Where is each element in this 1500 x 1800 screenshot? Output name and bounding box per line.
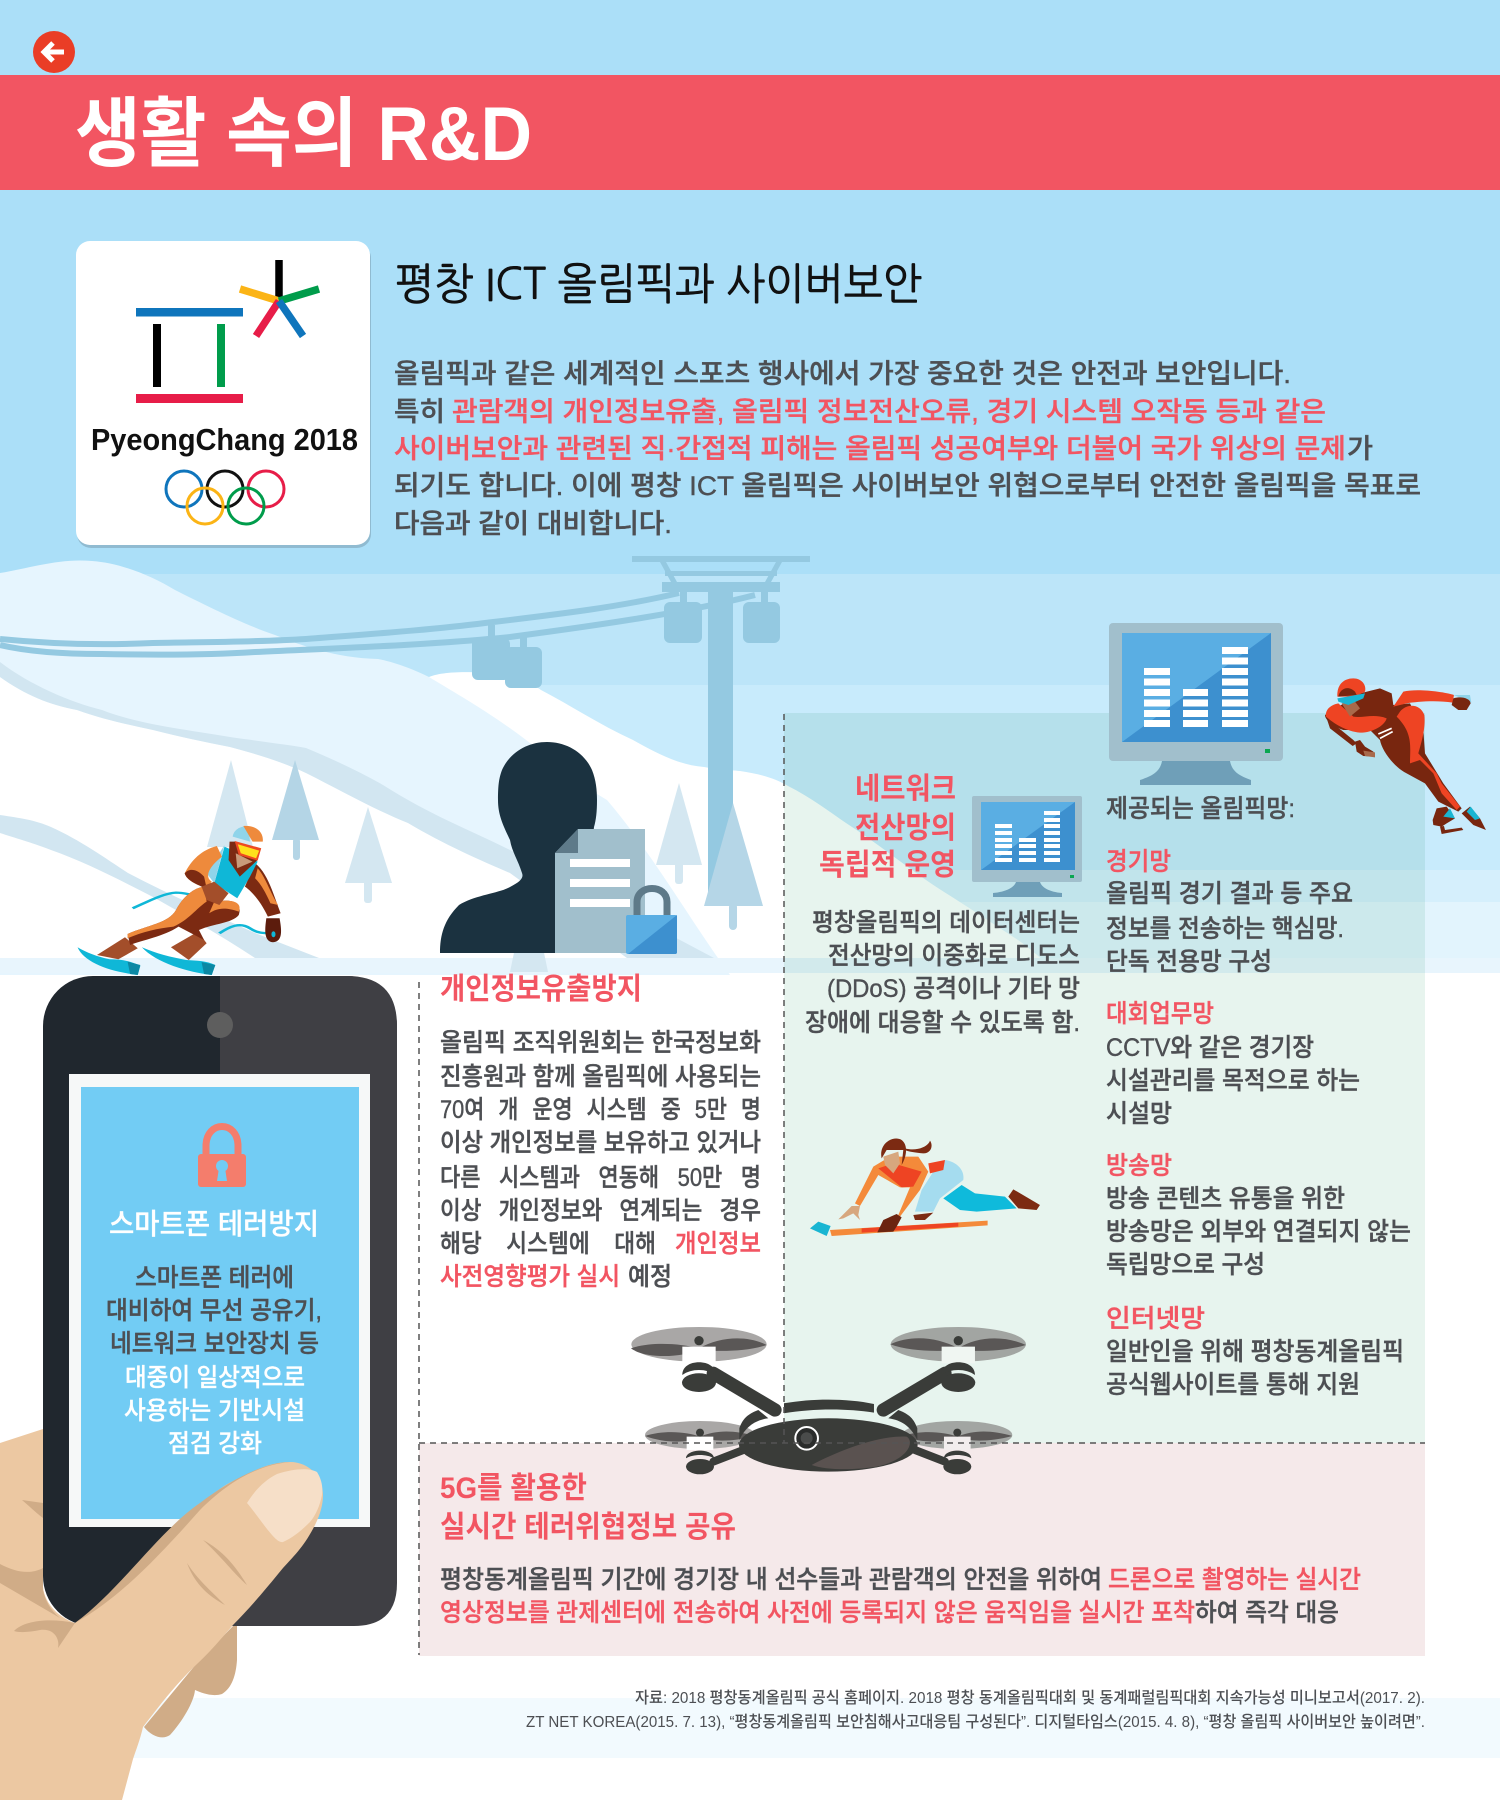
intro paragraph: 특히 <box>394 397 445 427</box>
section: network heading: 독립적 운영 <box>819 849 956 882</box>
phone body text: 네트워크 보안장치 등 <box>110 1330 319 1358</box>
icon: curler <box>810 1139 1040 1236</box>
section: 5G body <box>440 1566 1361 1627</box>
network: competition: 경기망 <box>1106 848 1171 876</box>
big tree over mast <box>704 803 763 930</box>
network: broadcast: 독립망으로 구성 <box>1106 1251 1265 1279</box>
section: privacy protection heading: 개인정보유출방지 <box>440 973 642 1006</box>
icon: drone <box>631 1327 1026 1474</box>
phone body text: 점검 강화 <box>168 1430 262 1458</box>
phone body text: 스마트폰 테러에 <box>135 1264 294 1292</box>
section: network body: 장애에 대응할 수 있도록 함. <box>805 1009 1080 1037</box>
section: network heading: 전산망의 <box>855 812 956 845</box>
network: competition: 정보를 전송하는 핵심망. <box>1106 915 1344 943</box>
section: privacy protection body: 70여 개 운영 시스템 중 5만 명 <box>440 1096 761 1124</box>
section: privacy protection body: 이상 개인정보와 연계되는 경우 <box>440 1197 761 1225</box>
section: privacy protection body: 올림픽 조직위원회는 한국정보화 <box>440 1029 761 1057</box>
panel: 5G pink background <box>419 1443 1425 1656</box>
phone body text <box>106 1264 322 1458</box>
section: 5G body: 하여 즉각 대응 <box>1195 1599 1339 1627</box>
list: Olympic networks <box>1106 795 1411 1399</box>
section: privacy protection body: 해당 시스템에 대해 <box>440 1230 656 1258</box>
intro paragraph: 관람객의 개인정보유출, 올림픽 정보전산오류, 경기 시스템 오작동 등과 같은 <box>452 397 1326 427</box>
section: privacy protection body: 예정 <box>628 1263 672 1291</box>
network: internet <box>1106 1305 1404 1399</box>
section: network body <box>805 909 1080 1037</box>
trees <box>207 760 702 972</box>
phone body text: 사용하는 기반시설 <box>124 1397 305 1425</box>
ski lift tower, cables and gondolas <box>0 556 810 902</box>
section: network body: 전산망의 이중화로 디도스 <box>828 942 1080 970</box>
source notes: 자료: 2018 평창동계올림픽 공식 홈페이지. 2018 평창 동계올림픽대회 및 동계패럴림픽대회 지속가능성 미니보고서(2017. 2). <box>635 1689 1425 1707</box>
icon: alpine skier <box>78 826 281 975</box>
icon: hand holding phone <box>0 1429 323 1800</box>
phone body text: 대중이 일상적으로 <box>125 1364 305 1392</box>
phone heading: 스마트폰 테러방지 <box>109 1208 319 1241</box>
title banner <box>0 75 1500 190</box>
network: operations: 시설망 <box>1106 1100 1172 1128</box>
network: competition: 올림픽 경기 결과 등 주요 <box>1106 880 1353 908</box>
section: privacy protection body: 사전영향평가 실시 <box>440 1263 620 1291</box>
list: Olympic networks: 제공되는 올림픽망: <box>1106 795 1295 823</box>
section: 5G body: 영상정보를 관제센터에 전송하여 사전에 등록되지 않은 움직임을 실시간 포착 <box>440 1599 1195 1627</box>
section: privacy protection body: 진흥원과 함께 올림픽에 사용되는 <box>440 1063 761 1091</box>
section: privacy protection body: 이상 개인정보를 보유하고 있거나 <box>440 1129 761 1157</box>
icon: big monitor <box>1109 623 1283 785</box>
network: broadcast: 방송 콘텐츠 유통을 위한 <box>1106 1185 1345 1213</box>
back button <box>33 31 75 73</box>
icon: phone lock <box>198 1126 246 1187</box>
section: privacy protection body <box>440 1029 761 1291</box>
network: operations: 시설관리를 목적으로 하는 <box>1106 1067 1360 1095</box>
PyeongChang emblem <box>136 260 319 403</box>
intro paragraph: 사이버보안과 관련된 직·간접적 피해는 올림픽 성공여부와 더불어 국가 위상의 문제 <box>394 434 1346 464</box>
network: internet: 공식웹사이트를 통해 지원 <box>1106 1371 1360 1399</box>
icon: smartphone <box>43 976 397 1626</box>
icon: person with document and lock <box>440 742 677 954</box>
source notes: ZT NET KOREA(2015. 7. 13), “평창동계올림픽 보안침해사고대응팀 구성된다”. 디지털타임스(2015. 4. 8), “평창 올림픽 사이버보안 높이려면”. <box>526 1713 1425 1731</box>
section: 5G heading: 실시간 테러위협정보 공유 <box>440 1511 736 1544</box>
section: network heading: 네트워크 <box>855 773 956 806</box>
intro paragraph: 되기도 합니다. 이에 평창 ICT 올림픽은 사이버보안 위협으로부터 안전한 올림픽을 목표로 <box>394 471 1421 501</box>
intro paragraph: 가 <box>1347 434 1373 464</box>
source notes <box>526 1689 1425 1731</box>
network: competition <box>1106 848 1353 976</box>
section: network heading <box>819 773 956 882</box>
network: operations <box>1106 1000 1360 1128</box>
section: network body: 평창올림픽의 데이터센터는 <box>812 909 1080 937</box>
dashed panel dividers <box>419 714 1425 1655</box>
network: internet: 인터넷망 <box>1106 1305 1205 1333</box>
logo card <box>76 241 371 548</box>
intro paragraph: 올림픽과 같은 세계적인 스포츠 행사에서 가장 중요한 것은 안전과 보안입니다. <box>394 359 1291 389</box>
section: 5G body: 평창동계올림픽 기간에 경기장 내 선수들과 관람객의 안전을 위하여 <box>440 1566 1102 1594</box>
section: privacy protection body: 다른 시스템과 연동해 50만 명 <box>440 1164 761 1192</box>
network: competition: 단독 전용망 구성 <box>1106 948 1272 976</box>
section: 5G heading <box>440 1472 736 1544</box>
panel: network green background <box>784 713 1425 1443</box>
section: network body: (DDoS) 공격이나 기타 망 <box>827 975 1080 1003</box>
section: 5G body: 드론으로 촬영하는 실시간 <box>1108 1566 1361 1594</box>
olympic rings <box>166 471 284 524</box>
network: operations: CCTV와 같은 경기장 <box>1106 1034 1314 1062</box>
network: broadcast: 방송망은 외부와 연결되지 않는 <box>1106 1218 1411 1246</box>
title banner: 생활 속의 R&D <box>75 92 532 177</box>
handwritten heading: 평창 ICT 올림픽과 사이버보안 <box>395 263 922 306</box>
network: internet: 일반인을 위해 평창동계올림픽 <box>1106 1338 1404 1366</box>
section: privacy protection body: 개인정보 <box>675 1230 761 1258</box>
network: operations: 대회업무망 <box>1106 1000 1214 1028</box>
snow hills <box>0 560 1500 975</box>
icon: speed skater <box>1325 678 1486 834</box>
network: broadcast <box>1106 1152 1411 1279</box>
network: broadcast: 방송망 <box>1106 1152 1172 1180</box>
logo wordmark: PyeongChang 2018 <box>91 422 358 457</box>
icon: small monitor <box>972 796 1082 897</box>
section: 5G heading: 5G를 활용한 <box>440 1472 587 1505</box>
phone body text: 대비하여 무선 공유기, <box>106 1297 322 1325</box>
intro paragraph <box>394 359 1421 539</box>
intro paragraph: 다음과 같이 대비합니다. <box>394 509 672 539</box>
